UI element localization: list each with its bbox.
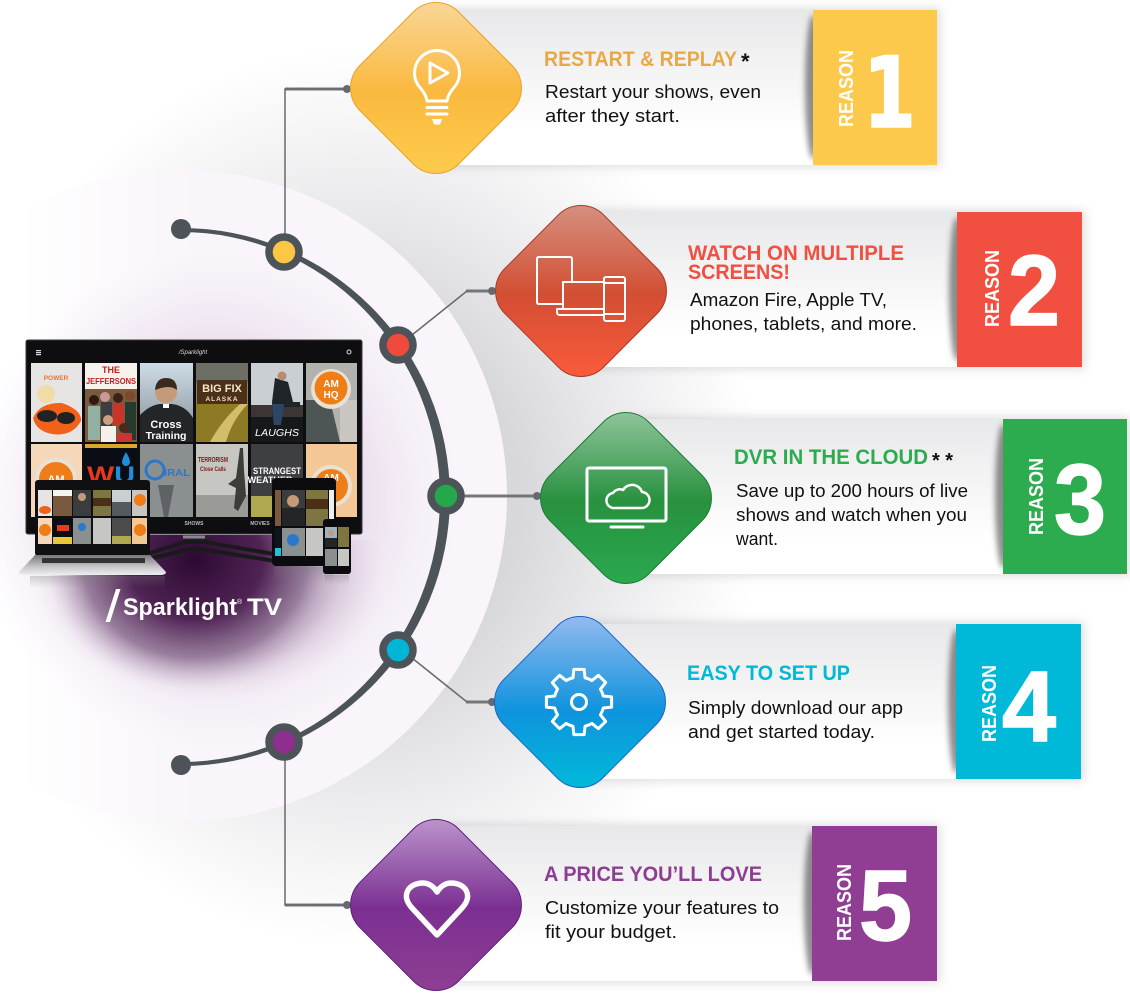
tile: AM HQ: HQ (324, 390, 339, 401)
tile: Cross Training (140, 363, 193, 442)
tile: Spiral: IRAL (164, 468, 190, 479)
TV header (36, 350, 351, 356)
timeline nodes (269, 237, 461, 757)
panel: reason 2 (496, 206, 1085, 376)
tile: AM orange: AM (47, 474, 65, 486)
TV stand (140, 537, 285, 561)
tile: AM weekend (306, 444, 357, 517)
pink glow (0, 250, 465, 750)
TV (26, 340, 362, 534)
tile: Terrorism: TERRORISM (198, 457, 228, 464)
phone (323, 519, 351, 574)
body text: Amazon Fire, Apple TV, (690, 290, 887, 310)
heading (688, 242, 904, 284)
reason number: 1 (863, 37, 916, 151)
card body (575, 212, 959, 367)
body text: after they start. (545, 106, 680, 126)
body text (690, 290, 917, 334)
tile: AM HQ: AM (323, 379, 339, 390)
tile: WU (85, 444, 137, 517)
device reflections (30, 567, 349, 588)
panel: reason 1 (351, 3, 940, 173)
tile: PowerLegs (31, 363, 82, 442)
reason label: REASON (982, 250, 1004, 327)
tile: Terrorism: Close Calls (200, 467, 227, 473)
heading: WATCH ON MULTIPLE (688, 242, 904, 265)
tile: Cross Training: Training (146, 430, 186, 442)
tile: AM HQ (306, 363, 357, 442)
body text: Simply download our app (688, 698, 903, 718)
card body (620, 419, 1005, 574)
reason tab (813, 10, 937, 165)
body text (735, 481, 968, 549)
reason tab (812, 826, 937, 981)
body text (545, 898, 779, 942)
tile: Strangest Weather: WEATHER (248, 475, 293, 485)
TV footer labels: MOVIES (250, 521, 270, 527)
tile: Spiral (140, 444, 193, 517)
reason number: 5 (859, 850, 912, 962)
panel: reason 4 (495, 617, 1084, 787)
body text: shows and watch when you (736, 505, 967, 525)
body text: fit your budget. (545, 922, 677, 942)
tile: The Jeffersons: JEFFERSONS (86, 376, 136, 386)
reason label: REASON (1026, 458, 1048, 535)
card body (574, 624, 958, 779)
tile: Big Fix Alaska (196, 363, 248, 442)
reason tab (1003, 419, 1127, 574)
reason number: 3 (1054, 444, 1106, 556)
panel: reason 5 (351, 820, 940, 990)
tile: Laughs: LAUGHS (255, 428, 299, 439)
tile: Terrorism (196, 444, 248, 517)
tile: PowerLegs: POWER (44, 375, 69, 382)
logo: Sparklight TV: TV (247, 594, 282, 621)
tablet (272, 478, 336, 566)
tile: The Jeffersons (85, 363, 137, 442)
heading: SCREENS! (688, 261, 790, 284)
tile: AM weekend: AM (323, 473, 339, 484)
card body (430, 826, 814, 981)
reason number: 4 (1002, 651, 1056, 763)
purple floor glow (30, 535, 400, 705)
card body (430, 10, 815, 165)
logo: Sparklight TV: ® (237, 598, 243, 606)
body text: phones, tablets, and more. (690, 314, 917, 334)
timeline arc (171, 219, 450, 775)
tile: WU: WU (87, 462, 135, 489)
diamond icon: gear (495, 617, 665, 787)
panel: reason 3 (541, 413, 1130, 583)
laptop (19, 480, 166, 575)
logo: Sparklight TV (106, 589, 282, 622)
reason tab (957, 212, 1082, 367)
body text: Restart your shows, even (545, 82, 761, 102)
TV header: /Sparklight (178, 350, 208, 356)
reason tab (956, 624, 1081, 779)
TV footer labels (185, 521, 270, 527)
heading: A PRICE YOU’LL LOVE (544, 863, 762, 886)
asterisks: ** (932, 450, 953, 472)
tile: Big Fix Alaska: BIG FIX (202, 383, 243, 395)
reason label: REASON (836, 50, 858, 127)
body text: and get started today. (688, 722, 875, 742)
reason label: REASON (979, 665, 1001, 742)
heading: RESTART & REPLAY (544, 48, 737, 71)
body text (688, 698, 903, 742)
tile: Strangest Weather (248, 444, 303, 517)
diamond icon: cloud monitor (541, 413, 711, 583)
logo: Sparklight TV: Sparklight (123, 594, 237, 621)
body text (545, 82, 761, 126)
TV footer labels: SHOWS (185, 521, 204, 527)
tile: The Jeffersons: THE (102, 365, 120, 375)
diamond icon: light bulb (351, 3, 521, 173)
reason label: REASON (834, 864, 856, 941)
tile: AM orange (31, 444, 82, 517)
diamond icon: heart (351, 820, 521, 990)
tile: Big Fix Alaska: ALASKA (205, 396, 239, 403)
body text: Save up to 200 hours of live (736, 481, 968, 501)
tile: Strangest Weather: STRANGEST (253, 466, 301, 476)
reason number: 2 (1008, 235, 1060, 347)
tile: Cross Training: Cross (150, 419, 182, 431)
heading: EASY TO SET UP (687, 662, 850, 685)
tile: Laughs (251, 363, 303, 442)
body text: want. (735, 529, 778, 549)
large light circle (0, 170, 507, 822)
body text: Customize your features to (545, 898, 779, 918)
connector lines (285, 85, 541, 909)
heading: DVR IN THE CLOUD (734, 446, 928, 469)
asterisk: * (741, 49, 750, 74)
diamond icon: screens (496, 206, 666, 376)
